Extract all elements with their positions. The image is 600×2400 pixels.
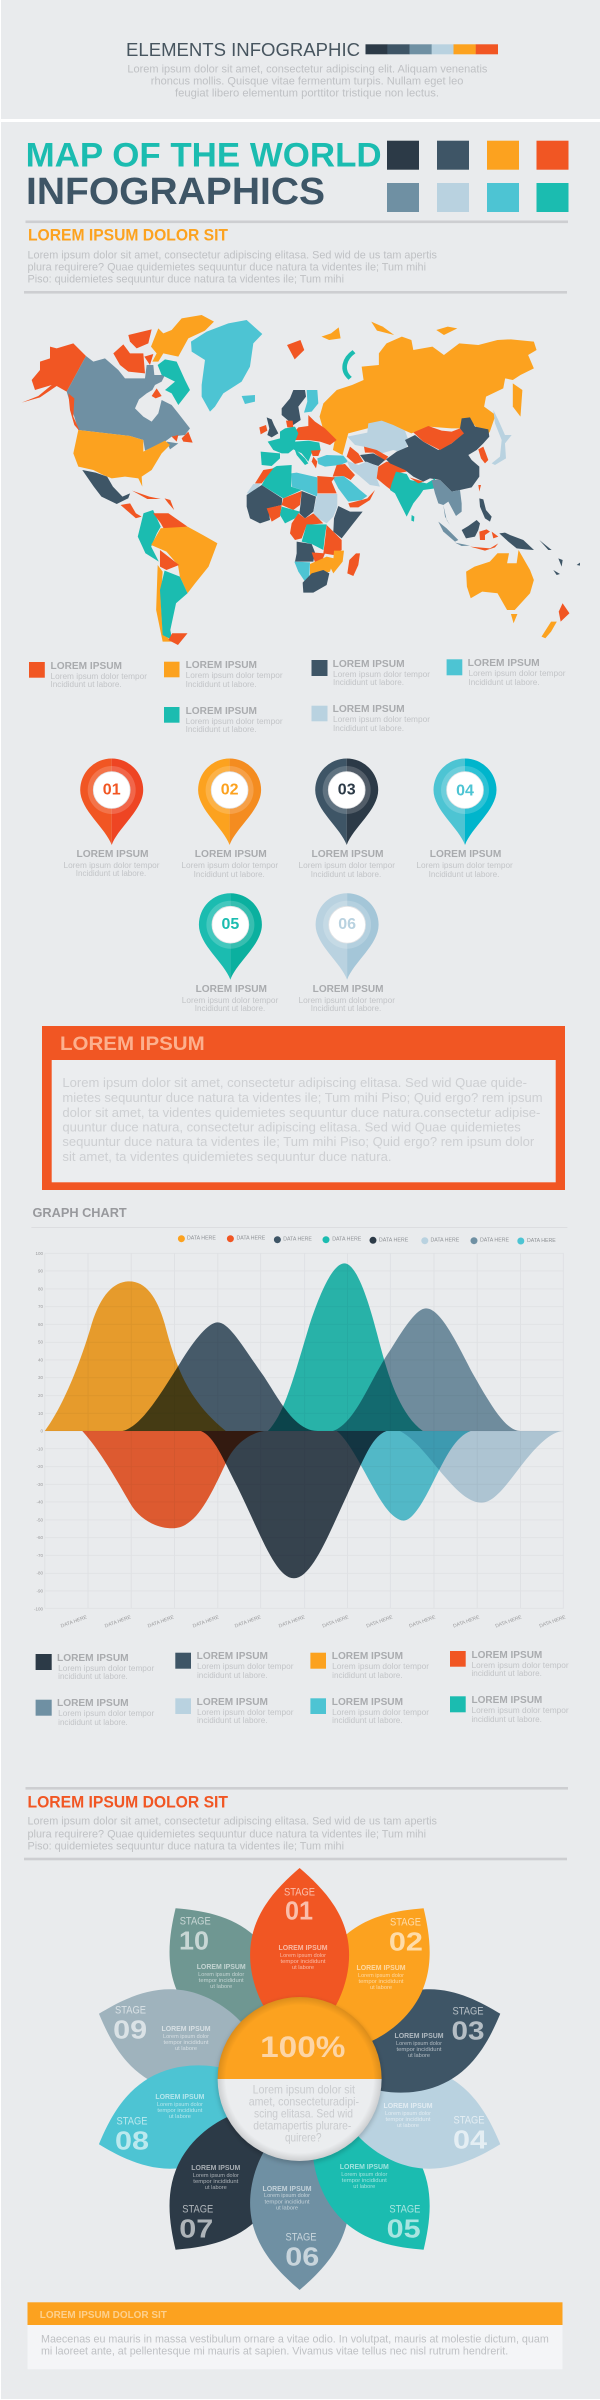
- key item 5: incididunt ut labore.: [58, 1718, 128, 1727]
- world map: [22, 315, 580, 645]
- legend item: cyan: [447, 658, 566, 687]
- petal: stage 10: Lorem ipsum dolor: [198, 1972, 244, 1978]
- callout paragraph: mietes sequuntur duce natura ta videntes ile; Tum mihi Piso; Quid ergo? rem ipsum: [62, 1090, 543, 1105]
- y axis labels: 40: [38, 1358, 43, 1362]
- chart legend: DATA HERE: [379, 1237, 409, 1243]
- key item 5: [36, 1698, 155, 1727]
- key item 6: incididunt ut labore.: [197, 1716, 268, 1725]
- petal: stage 09: tempor incididunt: [164, 2040, 209, 2046]
- hub text: [249, 2082, 359, 2144]
- legend item: cyan: LOREM IPSUM: [468, 658, 540, 669]
- key item 4: Lorem ipsum dolor tempor: [472, 1661, 569, 1670]
- petal: stage 01: STAGE: [284, 1887, 315, 1899]
- petal: stage 09: Lorem ipsum dolor: [163, 2034, 209, 2040]
- legend item: orange: LOREM IPSUM: [186, 660, 257, 671]
- petal: stage 10: tempor incididunt: [199, 1978, 244, 1984]
- petal: stage 06: tempor incididunt: [264, 2199, 310, 2205]
- legend item: navy: Incididunt ut labore.: [333, 678, 404, 687]
- pin 04: Lorem ipsum dolor tempor: [416, 861, 513, 870]
- key item 1: Lorem ipsum dolor tempor: [58, 1664, 155, 1673]
- main title: MAP OF THE WORLD: [26, 136, 382, 174]
- x axis labels: DATA HERE: [192, 1614, 221, 1630]
- colour bar: [366, 44, 498, 54]
- petal: stage 04: [322, 2044, 516, 2191]
- legend item: light blue: LOREM IPSUM: [333, 704, 405, 715]
- petal: stage 05: 05: [387, 2214, 421, 2244]
- x axis labels: DATA HERE: [104, 1614, 133, 1630]
- section paragraph: map: Lorem ipsum dolor sit amet, consectetur adipiscing elitasa. Sed wid de us tam apertis: [28, 249, 437, 261]
- pin 05: [182, 893, 279, 1013]
- key item 3: incididunt ut labore.: [332, 1671, 403, 1680]
- key item 4: incididunt ut labore.: [472, 1669, 542, 1678]
- petal: stage 10: ut labore: [210, 1984, 232, 1990]
- key item 7: incididunt ut labore.: [332, 1716, 403, 1725]
- header title: ELEMENTS INFOGRAPHIC: [126, 39, 360, 60]
- centre hub: [217, 1997, 383, 2164]
- y axis labels: 0: [40, 1428, 43, 1434]
- graph chart heading: GRAPH CHART: [32, 1205, 127, 1220]
- x axis labels: DATA HERE: [539, 1614, 567, 1630]
- petal: stage 01: 01: [285, 1895, 313, 1925]
- petal: stage 08: LOREM IPSUM: [155, 2094, 205, 2101]
- callout paragraph: quuntur duce natura, consectetur adipiscing elitasa. Sed wid Quae quidemietes: [62, 1120, 521, 1134]
- pin 06: Incididunt ut labore.: [311, 1004, 381, 1013]
- main title: [26, 136, 382, 213]
- chart legend: DATA HERE: [283, 1237, 312, 1243]
- petal: stage 02: Lorem ipsum dolor: [358, 1973, 404, 1979]
- y axis labels: -80: [36, 1571, 43, 1576]
- petal: stage 01: tempor incididunt: [280, 1959, 326, 1965]
- pin 04: 04: [456, 782, 474, 800]
- x axis labels: DATA HERE: [495, 1614, 523, 1630]
- key item 3: Lorem ipsum dolor tempor: [332, 1662, 429, 1671]
- section paragraph: map: plura requirere? Quae quidemietes sequuntur duce natura ta videntes ile; Tum mihi: [28, 261, 426, 273]
- y axis labels: 30: [38, 1375, 43, 1380]
- legend item: navy: [312, 659, 430, 687]
- series: light blue: [400, 1431, 564, 1503]
- key item 6: [175, 1697, 294, 1725]
- series: dark: [201, 1431, 387, 1578]
- petal: stage 06: STAGE: [286, 2232, 316, 2244]
- series: orange: [45, 1281, 226, 1431]
- pin 05: Lorem ipsum dolor tempor: [182, 996, 279, 1005]
- pin 06: LOREM IPSUM: [313, 984, 384, 995]
- petal: stage 08: STAGE: [116, 2116, 148, 2128]
- petal: stage 04: ut labore: [397, 2123, 419, 2129]
- hub percentage: 100%: [260, 2031, 345, 2064]
- location pins: [64, 758, 513, 1013]
- callout paragraph: dolor sit amet, ta videntes quidemietes sequuntur duce natura.consectetur adipise-: [62, 1105, 540, 1120]
- petal: stage 05: tempor incididunt: [342, 2178, 387, 2184]
- key item 8: [450, 1695, 569, 1724]
- bottom note text: mi laoreet ante, at pellentesque mi mauris at sapien. Vivamus vitae tellus nec nisl rutrum hendrerit.: [41, 2345, 508, 2357]
- x axis labels: DATA HERE: [60, 1614, 89, 1630]
- y axis labels: [34, 1251, 43, 1611]
- y axis labels: 10: [38, 1411, 43, 1416]
- key item 6: LOREM IPSUM: [197, 1697, 268, 1708]
- key item 3: LOREM IPSUM: [332, 1651, 403, 1662]
- petal: stage 06: [250, 2119, 349, 2290]
- map: europe, africa, middle east: [247, 390, 408, 593]
- key item 8: Lorem ipsum dolor tempor: [472, 1706, 569, 1715]
- pin 04: Incididunt ut labore.: [429, 870, 499, 879]
- panel: bottom note: [28, 2302, 562, 2369]
- petal: stage 03: [322, 1967, 516, 2114]
- colour swatches: [387, 141, 568, 212]
- petal: stage 05: Lorem ipsum dolor: [341, 2172, 387, 2178]
- section paragraph: map: [28, 249, 437, 285]
- y axis labels: 100: [35, 1251, 43, 1256]
- pin 01: Incididunt ut labore.: [76, 869, 146, 878]
- key item 2: incididunt ut labore.: [197, 1671, 268, 1680]
- series: red: [82, 1431, 264, 1528]
- legend item: cyan: Lorem ipsum dolor tempor: [468, 669, 566, 678]
- section paragraph: stages: Lorem ipsum dolor sit amet, consectetur adipiscing elitasa. Sed wid de us tam apertis: [28, 1815, 437, 1827]
- hub text: amet, consecteturadipi-: [249, 2094, 359, 2108]
- pin 03: [298, 758, 395, 879]
- key item 4: LOREM IPSUM: [472, 1650, 542, 1661]
- petal: stage 03: Lorem ipsum dolor: [396, 2041, 442, 2047]
- section paragraph: map: Piso: quidemietes sequuntur duce natura ta videntes ile; Tum mihi: [28, 273, 344, 285]
- petal: stage 09: STAGE: [115, 2005, 146, 2017]
- pin 06: Lorem ipsum dolor tempor: [298, 996, 395, 1005]
- petal: stage 02: LOREM IPSUM: [356, 1965, 406, 1972]
- legend item: navy: Lorem ipsum dolor tempor: [333, 670, 430, 679]
- section paragraph: stages: [28, 1815, 437, 1852]
- petal: stage 08: [84, 2044, 277, 2191]
- hub text: scing elitasa. Sed wid: [254, 2106, 353, 2120]
- y axis labels: -50: [36, 1517, 43, 1522]
- chart legend: DATA HERE: [332, 1237, 362, 1243]
- pin 02: Incididunt ut labore.: [194, 870, 265, 879]
- key item 5: LOREM IPSUM: [57, 1698, 129, 1709]
- x axis labels: DATA HERE: [408, 1614, 437, 1630]
- x axis labels: DATA HERE: [234, 1614, 263, 1630]
- header paragraph: rhoncus mollis. Quisque vitae fermentum turpis. Nullam eget leo: [151, 75, 463, 87]
- pin 03: 03: [338, 782, 356, 798]
- pin 05: 05: [222, 916, 239, 933]
- petal: stage 10: [136, 1879, 316, 2076]
- chart legend: DATA HERE: [187, 1236, 216, 1242]
- petal: stage 09: ut labore: [175, 2046, 197, 2052]
- chart key: [36, 1650, 569, 1727]
- key item 1: [36, 1653, 155, 1681]
- petal: stage 07: tempor incididunt: [193, 2179, 239, 2185]
- petal: stage 08: Lorem ipsum dolor: [157, 2102, 203, 2108]
- petal: stage 03: LOREM IPSUM: [394, 2033, 444, 2040]
- pin 02: Lorem ipsum dolor tempor: [181, 861, 279, 870]
- petal: stage 08: tempor incididunt: [157, 2108, 203, 2114]
- petal: stage 05: STAGE: [389, 2204, 420, 2216]
- chart legend: [178, 1235, 556, 1244]
- legend item: orange: [164, 660, 283, 689]
- pin 01: Lorem ipsum dolor tempor: [64, 861, 160, 870]
- chart legend: DATA HERE: [236, 1236, 266, 1242]
- petal: stage 07: STAGE: [182, 2204, 213, 2216]
- pin 06: 06: [338, 916, 356, 933]
- key item 1: LOREM IPSUM: [57, 1653, 129, 1664]
- petal: stage 01: LOREM IPSUM: [278, 1945, 328, 1952]
- bottom note text: Maecenas eu mauris in massa vestibulum ornare a vitae odio. In volutpat, mauris at molestie dictum, quam: [41, 2333, 549, 2345]
- petal: stage 04: 04: [453, 2125, 488, 2155]
- petal: stage 07: [136, 2082, 316, 2279]
- callout paragraph: [62, 1075, 543, 1164]
- petal: stage 02: tempor incididunt: [358, 1979, 404, 1985]
- petal: stage 06: ut labore: [276, 2205, 298, 2211]
- chart legend: DATA HERE: [430, 1238, 460, 1244]
- key item 4: [450, 1650, 569, 1678]
- petal: stage 10: LOREM IPSUM: [197, 1964, 246, 1971]
- key item 7: LOREM IPSUM: [332, 1697, 403, 1708]
- petal: stage 07: LOREM IPSUM: [191, 2165, 240, 2172]
- map: east asia: [386, 410, 580, 575]
- petal: stage 06: Lorem ipsum dolor: [264, 2193, 310, 2199]
- plot area: [45, 1253, 564, 1608]
- key item 2: LOREM IPSUM: [197, 1651, 268, 1662]
- petal: stage 07: 07: [179, 2214, 213, 2244]
- callout paragraph: Lorem ipsum dolor sit amet, consectetur adipiscing elitasa. Sed wid Quae quide-: [62, 1075, 527, 1090]
- pin 02: [181, 758, 279, 879]
- y axis labels: 80: [38, 1286, 43, 1291]
- petal: stage 03: STAGE: [452, 2006, 484, 2018]
- series: navy: [122, 1322, 318, 1431]
- chart legend: DATA HERE: [527, 1238, 556, 1244]
- pin 05: Incididunt ut labore.: [195, 1004, 265, 1013]
- petal: stage 04: STAGE: [454, 2115, 484, 2127]
- y axis labels: -60: [36, 1535, 43, 1540]
- petal: stage 08: 08: [115, 2125, 149, 2155]
- panel: orange callout: [42, 1026, 565, 1190]
- petal: stage 03: tempor incididunt: [396, 2047, 442, 2053]
- hub text: Lorem ipsum dolor sit: [253, 2082, 356, 2096]
- petal: stage 06: 06: [285, 2242, 319, 2272]
- petal: stage 01: Lorem ipsum dolor: [280, 1953, 326, 1959]
- legend item: teal: Incididunt ut labore.: [186, 725, 257, 734]
- key item 8: incididunt ut labore.: [472, 1715, 542, 1724]
- section paragraph: stages: Piso: quidemietes sequuntur duce natura ta videntes ile; Tum mihi: [28, 1840, 344, 1852]
- pin 01: 01: [103, 782, 121, 798]
- legend item: red: [29, 661, 147, 689]
- legend item: teal: Lorem ipsum dolor tempor: [186, 717, 283, 726]
- chart legend: DATA HERE: [480, 1238, 509, 1244]
- legend item: light blue: Incididunt ut labore.: [333, 724, 404, 733]
- petal: stage 02: STAGE: [390, 1917, 421, 1929]
- key item 2: Lorem ipsum dolor tempor: [197, 1662, 294, 1671]
- main title: INFOGRAPHICS: [26, 171, 325, 213]
- petal: stage 01: ut labore: [292, 1965, 314, 1971]
- y axis labels: 60: [38, 1322, 43, 1327]
- legend item: cyan: Incididunt ut labore.: [468, 678, 540, 687]
- petal: stage 07: ut labore: [205, 2185, 227, 2191]
- y axis labels: -90: [36, 1588, 43, 1594]
- section paragraph: stages: plura requirere? Quae quidemietes sequuntur duce natura ta videntes ile; Tum mihi: [28, 1828, 426, 1840]
- header: elements infographic: [126, 39, 498, 99]
- key item 7: [310, 1697, 429, 1725]
- key item 1: incididunt ut labore.: [58, 1672, 128, 1681]
- legend item: orange: Lorem ipsum dolor tempor: [186, 671, 283, 680]
- y axis labels: -40: [36, 1500, 43, 1505]
- pin 01: [64, 758, 160, 878]
- key item 5: Lorem ipsum dolor tempor: [58, 1709, 155, 1718]
- petal: stage 06: LOREM IPSUM: [262, 2186, 312, 2193]
- pin 04: LOREM IPSUM: [430, 849, 501, 860]
- hub text: quirere?: [285, 2130, 322, 2144]
- map: north america and greenland: [22, 315, 262, 487]
- legend item: light blue: Lorem ipsum dolor tempor: [333, 715, 430, 724]
- petal: stage 01: [250, 1868, 349, 2039]
- petal: stage 05: [283, 2082, 464, 2279]
- petal: stage 02: ut labore: [370, 1985, 392, 1991]
- pin 03: Lorem ipsum dolor tempor: [298, 861, 395, 870]
- callout paragraph: sit amet, ta videntes quidemietes sequuntur duce natura.: [62, 1149, 391, 1164]
- bottom note text: [41, 2333, 549, 2357]
- y axis labels: -100: [34, 1606, 43, 1611]
- petal: stage 05: ut labore: [353, 2184, 375, 2190]
- petal: stage 10: STAGE: [180, 1916, 211, 1928]
- pin 01: LOREM IPSUM: [76, 849, 148, 860]
- petal: stage 04: Lorem ipsum dolor: [385, 2111, 431, 2117]
- y axis labels: 50: [38, 1340, 43, 1345]
- petal: stage 08: ut labore: [169, 2114, 191, 2120]
- pin 04: [416, 758, 513, 879]
- key item 7: Lorem ipsum dolor tempor: [332, 1708, 429, 1717]
- map: latin america, russia, oceania: [82, 322, 569, 645]
- pin 06: [298, 893, 395, 1013]
- legend item: light blue: [312, 704, 430, 733]
- section heading: stages: LOREM IPSUM DOLOR SIT: [28, 1794, 228, 1812]
- area chart: [34, 1251, 567, 1630]
- petal: stage 04: tempor incididunt: [386, 2117, 431, 2123]
- series: slate: [333, 1308, 520, 1431]
- petal: stage 03: 03: [452, 2015, 484, 2045]
- y axis labels: -70: [36, 1553, 43, 1558]
- series: cyan: [337, 1431, 471, 1521]
- petal: stage 02: [283, 1879, 464, 2076]
- callout paragraph: sequuntur duce natura ta videntes ile; Tum mihi Piso; Quid ergo? rem ipsum dolor: [62, 1134, 535, 1149]
- y axis labels: -20: [36, 1464, 43, 1469]
- pin 03: Incididunt ut labore.: [311, 870, 381, 879]
- flower diagram: [84, 1868, 516, 2290]
- petal: stage 10: 10: [179, 1926, 209, 1956]
- pin 02: 02: [221, 782, 239, 798]
- petal: stage 02: 02: [389, 1927, 423, 1957]
- x axis labels: DATA HERE: [366, 1614, 394, 1630]
- y axis labels: -10: [36, 1446, 43, 1451]
- key item 3: [310, 1651, 429, 1680]
- callout heading: LOREM IPSUM: [60, 1034, 205, 1055]
- legend item: teal: [164, 706, 283, 734]
- header paragraph: Lorem ipsum dolor sit amet, consectetur adipiscing elit. Aliquam venenatis: [127, 63, 488, 75]
- y axis labels: 70: [38, 1304, 43, 1309]
- petal: stage 07: Lorem ipsum dolor: [193, 2173, 239, 2179]
- legend item: navy: LOREM IPSUM: [333, 659, 405, 670]
- x axis labels: DATA HERE: [452, 1614, 481, 1630]
- petal: stage 03: ut labore: [408, 2053, 430, 2059]
- pin 02: LOREM IPSUM: [195, 849, 267, 860]
- petal: stage 09: [84, 1967, 277, 2114]
- y axis labels: 20: [38, 1393, 43, 1398]
- x axis labels: DATA HERE: [278, 1614, 307, 1630]
- key item 8: LOREM IPSUM: [472, 1695, 542, 1706]
- hub text: detamapertis plurare-: [253, 2118, 351, 2132]
- legend item: red: Incididunt ut labore.: [50, 680, 122, 689]
- map legend: [29, 658, 566, 734]
- x axis labels: DATA HERE: [322, 1614, 350, 1630]
- petal: stage 04: LOREM IPSUM: [384, 2103, 433, 2110]
- header paragraph: [127, 63, 488, 99]
- y axis labels: 90: [38, 1269, 43, 1274]
- petal: stage 05: LOREM IPSUM: [340, 2164, 389, 2171]
- petal: stage 09: LOREM IPSUM: [162, 2026, 211, 2033]
- legend item: teal: LOREM IPSUM: [186, 706, 257, 717]
- section heading: map: LOREM IPSUM DOLOR SIT: [28, 226, 228, 244]
- key item 2: [175, 1651, 294, 1680]
- legend item: red: LOREM IPSUM: [50, 661, 122, 672]
- petal: stage 09: 09: [113, 2015, 147, 2045]
- key item 6: Lorem ipsum dolor tempor: [197, 1708, 294, 1717]
- x axis labels: DATA HERE: [147, 1614, 176, 1630]
- series: teal: [268, 1263, 423, 1431]
- y axis labels: -30: [36, 1482, 43, 1487]
- bottom note heading: LOREM IPSUM DOLOR SIT: [40, 2310, 167, 2321]
- pin 05: LOREM IPSUM: [196, 984, 267, 995]
- x axis labels: [60, 1614, 567, 1630]
- legend item: red: Lorem ipsum dolor tempor: [50, 672, 147, 681]
- pin 03: LOREM IPSUM: [312, 849, 384, 860]
- legend item: orange: Incididunt ut labore.: [186, 680, 257, 689]
- header paragraph: feugiat libero elementum porttitor tristique non lectus.: [175, 87, 439, 99]
